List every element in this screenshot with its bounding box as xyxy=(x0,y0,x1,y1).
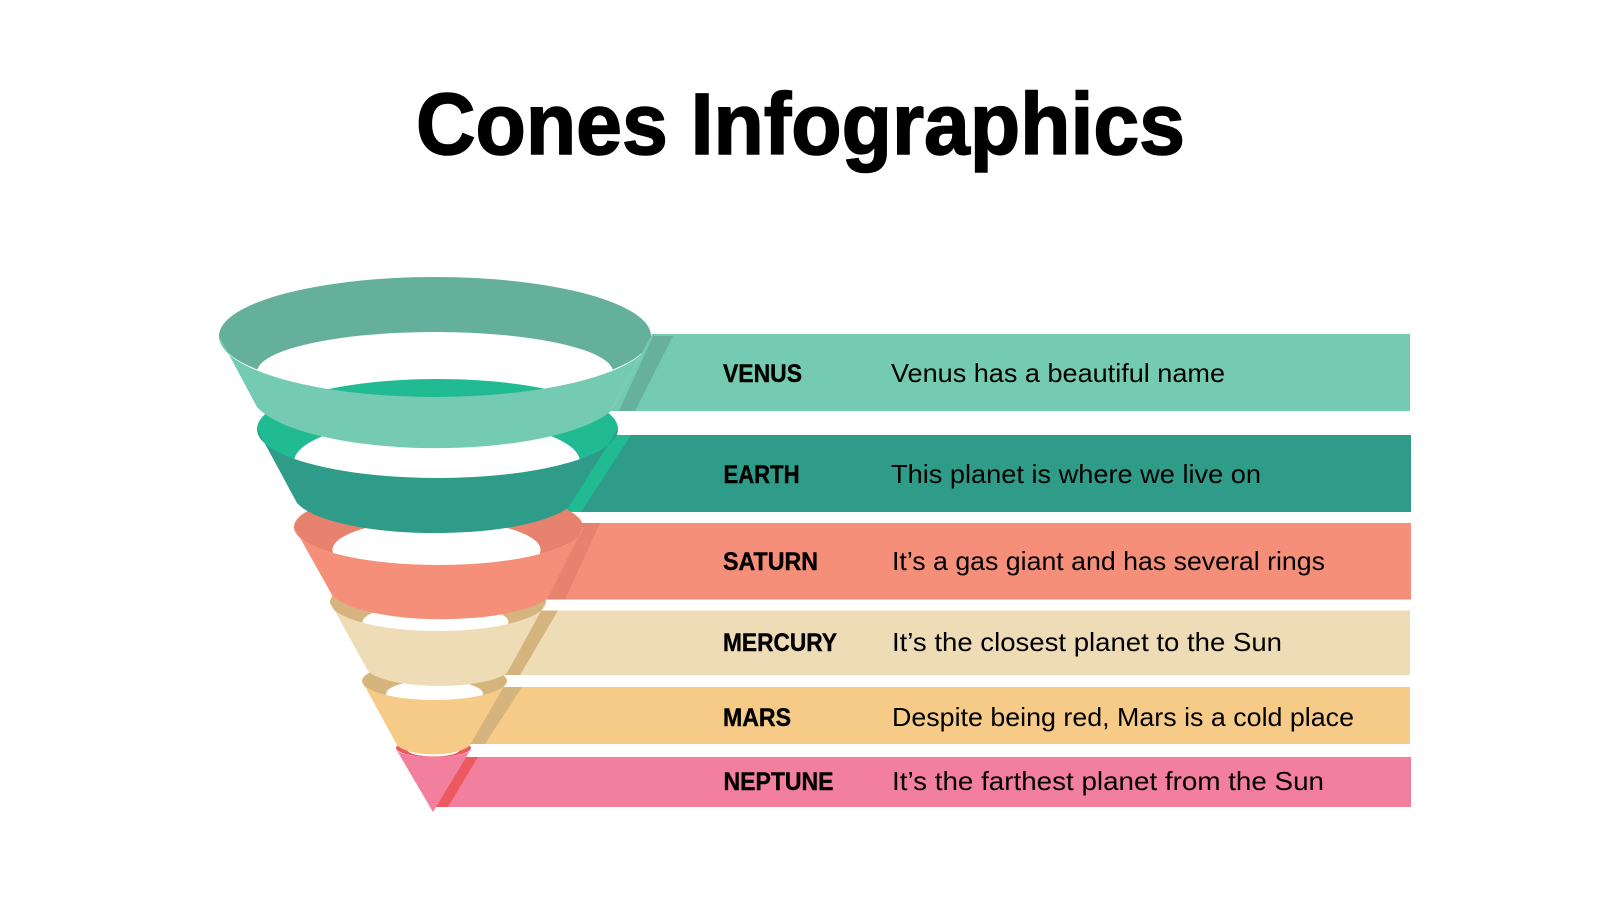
cone front: mars xyxy=(362,681,507,754)
labels: saturn: It’s a gas giant and has several rings xyxy=(892,546,1325,576)
cone back: venus xyxy=(219,277,651,412)
labels: neptune: NEPTUNE xyxy=(724,768,834,796)
labels: mars: Despite being red, Mars is a cold place xyxy=(892,702,1354,732)
cone back: mercury xyxy=(330,573,546,640)
labels: earth xyxy=(724,459,1261,489)
cone back: saturn xyxy=(294,489,583,580)
labels: earth: This planet is where we live on xyxy=(891,459,1261,489)
cone back: mars xyxy=(362,662,507,708)
cone back: earth xyxy=(257,379,618,505)
cone front: earth xyxy=(257,429,618,533)
cone front: saturn xyxy=(294,527,583,619)
bar: saturn xyxy=(545,523,1411,600)
panel: bars xyxy=(433,334,1411,807)
labels: mercury xyxy=(723,627,1282,657)
labels: venus xyxy=(723,358,1225,388)
bar: earth xyxy=(565,435,1411,512)
labels: saturn: SATURN xyxy=(723,548,818,576)
cone back: neptune xyxy=(396,739,471,757)
bar: venus xyxy=(611,334,1410,411)
chart: cone xyxy=(219,277,651,812)
cone front: venus xyxy=(219,336,651,448)
labels: venus: Venus has a beautiful name xyxy=(891,358,1225,388)
labels: mars: MARS xyxy=(723,704,791,732)
labels: mercury: MERCURY xyxy=(723,629,837,657)
cone front: mercury xyxy=(330,602,546,686)
bar: mercury xyxy=(504,610,1410,675)
cone front: neptune xyxy=(396,749,471,812)
labels: mercury: It’s the closest planet to the Sun xyxy=(892,627,1282,657)
title: Cones Infographics xyxy=(416,76,1185,173)
labels: neptune xyxy=(724,766,1324,796)
bar: neptune xyxy=(433,757,1411,807)
labels: venus: VENUS xyxy=(723,360,802,388)
labels: earth: EARTH xyxy=(724,461,800,489)
labels: neptune: It’s the farthest planet from the Sun xyxy=(892,766,1324,796)
bar: mars xyxy=(468,687,1410,744)
